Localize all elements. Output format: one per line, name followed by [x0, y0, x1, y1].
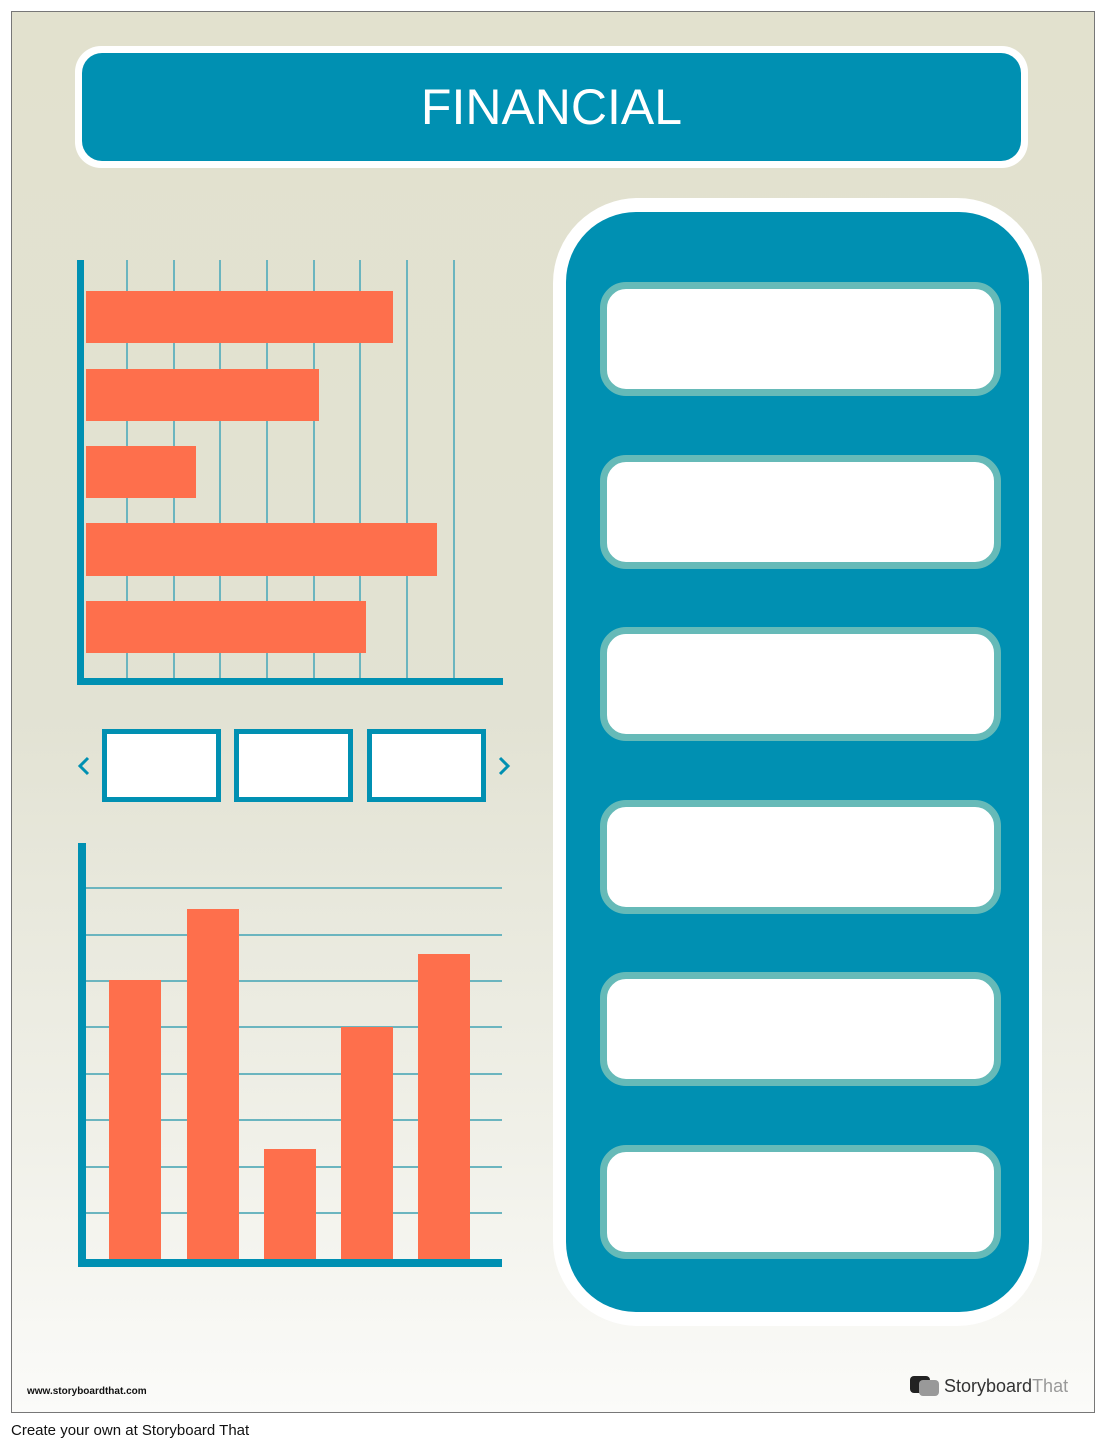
arrow right — [499, 757, 510, 775]
footer url: www.storyboardthat.com — [27, 1386, 147, 1397]
arrow left — [78, 757, 89, 775]
text box 2 — [600, 455, 1001, 569]
logo: StoryboardThat — [944, 1376, 1068, 1396]
text box 4 — [600, 800, 1001, 914]
carousel boxes — [78, 729, 510, 802]
vertical bar chart — [78, 843, 502, 1267]
panel: right list — [553, 198, 1042, 1326]
caption: Create your own at Storyboard That — [11, 1422, 249, 1439]
text box 5 — [600, 972, 1001, 1086]
text box 1 — [600, 282, 1001, 396]
title — [75, 46, 1028, 168]
text box 3 — [600, 627, 1001, 741]
text box 6 — [600, 1145, 1001, 1259]
horizontal bar chart — [77, 260, 503, 685]
title: FINANCIAL — [421, 79, 682, 135]
